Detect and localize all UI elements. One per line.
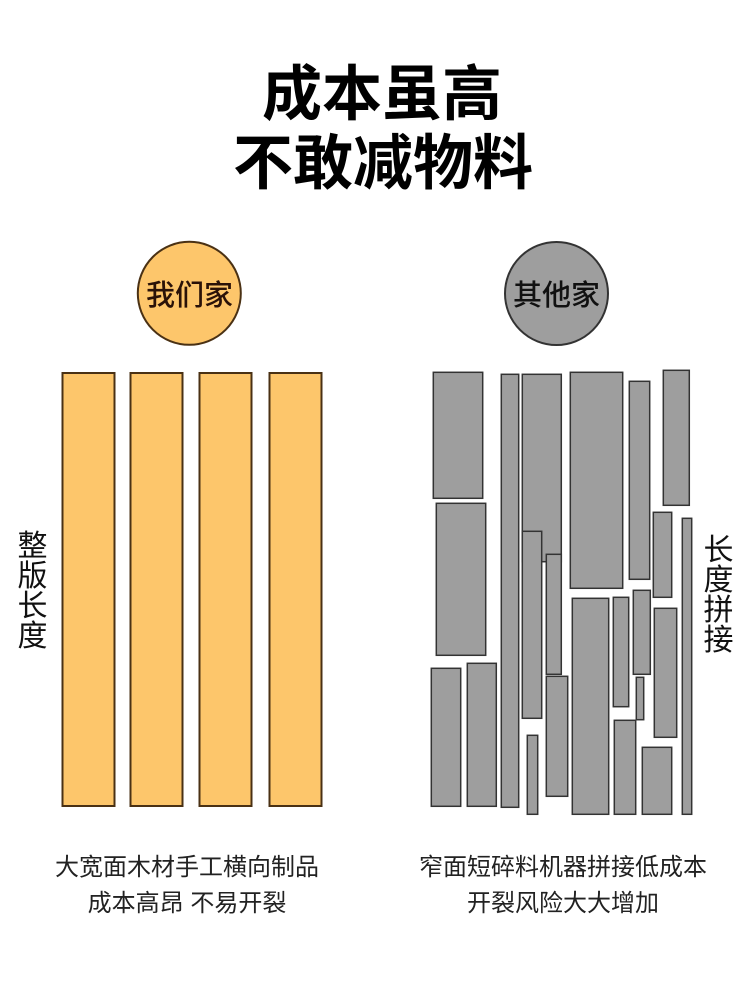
title: 成本虽高 <box>262 61 502 128</box>
badge: our brand: 我们家 <box>146 279 233 312</box>
caption: our brand <box>55 854 319 917</box>
title <box>233 61 533 197</box>
caption: other brands: 开裂风险大大增加 <box>467 890 659 917</box>
side label: full-length: 长 <box>18 590 48 623</box>
side label: full-length: 度 <box>18 620 48 653</box>
caption: other brands: 窄面短碎料机器拼接低成本 <box>419 854 707 881</box>
badge: other brands: 其他家 <box>513 279 600 312</box>
panel: full-length orange boards <box>62 373 322 806</box>
side label: full-length: 版 <box>18 560 48 593</box>
panel: spliced gray short boards <box>431 370 692 814</box>
caption: our brand: 成本高昂 不易开裂 <box>88 890 286 917</box>
side label: spliced length: 拼 <box>704 594 734 627</box>
caption: other brands <box>419 854 707 917</box>
side label: full-length <box>18 530 48 653</box>
title: 不敢减物料 <box>233 130 533 197</box>
side label: spliced length <box>704 534 734 657</box>
badge: our brand <box>138 242 241 345</box>
caption: our brand: 大宽面木材手工横向制品 <box>55 854 319 881</box>
side label: spliced length: 度 <box>704 564 734 597</box>
side label: full-length: 整 <box>18 530 48 563</box>
side label: spliced length: 长 <box>704 534 734 567</box>
badge: other brands <box>505 242 608 345</box>
side label: spliced length: 接 <box>704 624 734 657</box>
